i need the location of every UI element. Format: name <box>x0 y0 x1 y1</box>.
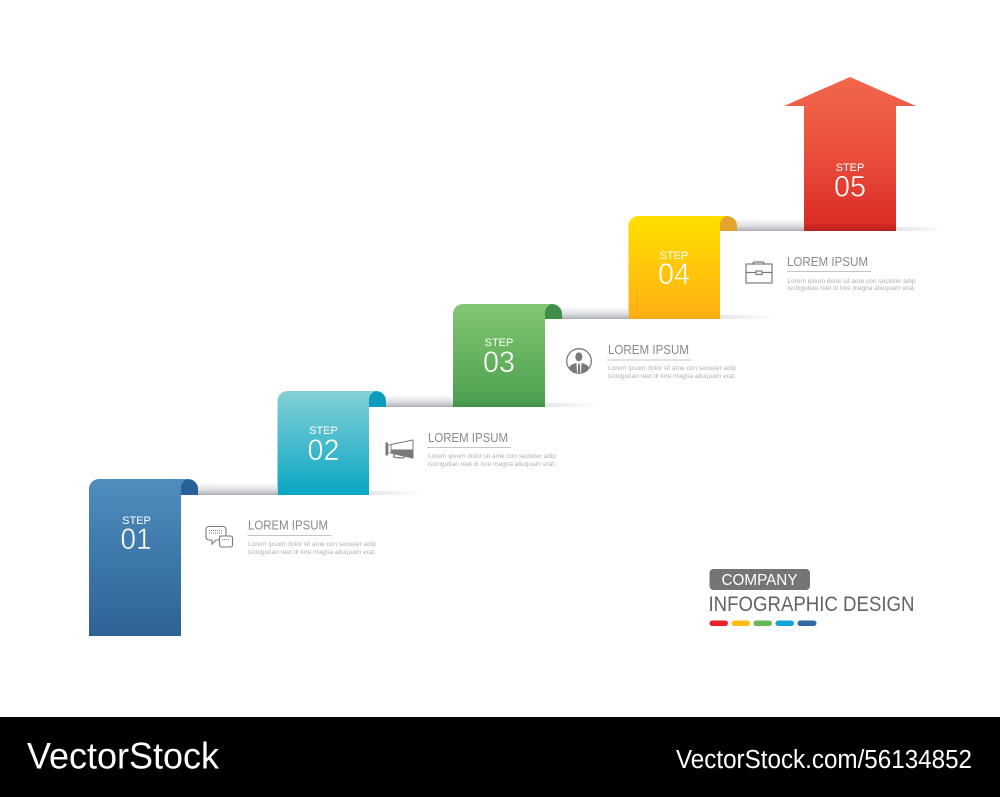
text: step 02: LOREM IPSUM <box>428 431 508 445</box>
icon: businessman <box>567 349 591 373</box>
panel: step 01: STEP <box>122 515 151 527</box>
ribbon 01 <box>89 479 188 636</box>
panel: step 02: 02 <box>308 434 340 467</box>
panel: step 02 <box>278 391 600 495</box>
text: step 03: iscingutiao reet di lore magna aliuquam erat. <box>608 373 736 380</box>
panel: step 01 <box>89 479 424 636</box>
panel: step 02: STEP <box>309 425 338 437</box>
icon: speech bubbles <box>206 526 232 547</box>
panel: step 04: 04 <box>658 258 690 291</box>
ribbon 04 <box>628 216 727 319</box>
icon: megaphone <box>386 440 413 458</box>
footer url: VectorStock.com/56134852 <box>676 746 972 774</box>
text: step 02 <box>427 431 557 468</box>
panel: step 03: 03 <box>483 346 515 379</box>
text: step 02: Lorem ipsum dolor sit ame con secteter adip <box>428 453 557 460</box>
ribbon fold 01 <box>181 479 198 495</box>
step 05 arrow: STEP <box>836 162 864 174</box>
text: step 01: Lorem ipsum dolor sit ame con secteter adip <box>248 541 377 548</box>
company badge: COMPANY <box>722 572 798 589</box>
text: step 04: LOREM IPSUM <box>787 255 868 269</box>
ribbon fold 02 <box>369 391 386 407</box>
text: step 03: Lorem ipsum dolor sit ame con secteter adip <box>608 365 737 372</box>
step 05 arrow: 05 <box>834 170 866 204</box>
text: step 04 <box>787 255 916 292</box>
company badge <box>710 569 810 590</box>
ribbon fold 03 <box>545 304 562 319</box>
text: step 04: Lorem ipsum dolor sit ame con secteter adip <box>788 278 916 285</box>
footer bar <box>0 717 1000 797</box>
text: step 01 <box>248 518 377 556</box>
icon: briefcase <box>746 262 772 283</box>
text: step 03 <box>607 343 737 380</box>
colour legend dots <box>710 620 816 626</box>
step 05 arrow <box>784 77 916 231</box>
text: step 01: LOREM IPSUM <box>248 518 328 532</box>
panel: step 04 <box>628 216 948 319</box>
text: step 01: iscingutiao reet di lore magna aliuquam erat. <box>248 549 376 556</box>
text: step 02: iscingutiao reet di lore magna aliuquam erat. <box>428 461 556 468</box>
ribbon fold 04 <box>720 216 737 231</box>
ribbon 02 <box>278 391 376 495</box>
panel: step 04: STEP <box>660 250 688 262</box>
heading: infographic design: INFOGRAPHIC DESIGN <box>708 593 914 616</box>
text: step 04: iscingutiao reet di lore magna aliuquam erat. <box>788 285 916 292</box>
panel: step 03 <box>453 304 775 407</box>
footer logo: VectorStock <box>27 736 219 776</box>
text: step 03: LOREM IPSUM <box>608 343 689 357</box>
panel: step 01: 01 <box>120 523 152 556</box>
ribbon 03 <box>453 304 552 407</box>
panel: step 03: STEP <box>485 337 513 349</box>
